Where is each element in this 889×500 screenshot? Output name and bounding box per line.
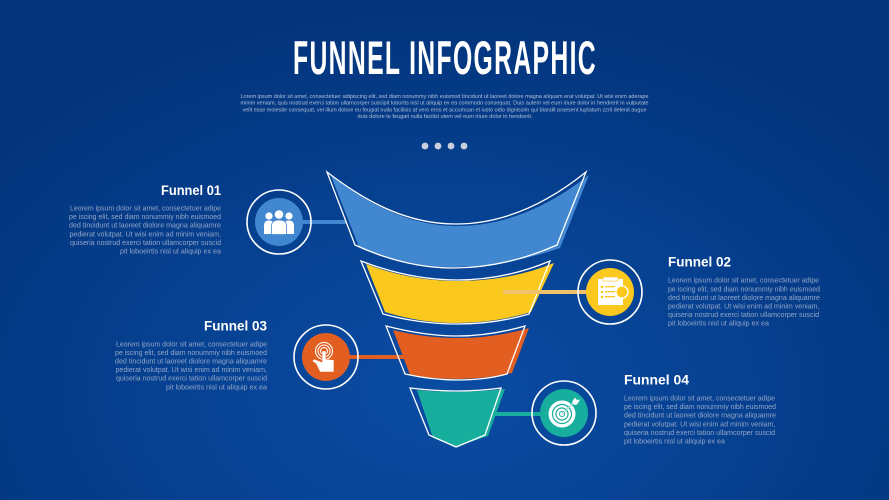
text block: funnel 02: pedierat volutpat. Ut wisi enim ad minim veniam, bbox=[668, 304, 820, 310]
text block: funnel 02: pe iscing elit, sed diam nonummiy nibh euismoed bbox=[668, 286, 820, 293]
text block: funnel 01: pit loboeirtis nisl ut aliquip ex ea bbox=[120, 248, 221, 256]
text block: funnel 01: quiseria nostrud exerci tation ullamcorper suscid bbox=[70, 240, 221, 247]
icon badge: touch bbox=[294, 325, 358, 389]
text block: funnel 01 bbox=[69, 182, 221, 256]
text block: funnel 01: ded tincidunt ut laoreet diolore magna aliquamre bbox=[69, 223, 221, 230]
text block: funnel 04: pit loboeirtis nisl ut aliquip ex ea bbox=[624, 438, 725, 446]
funnel segment 1: blue bbox=[327, 172, 589, 268]
text block: funnel 01: Leorem ipsum dolor sit amet, consectetuer adipe bbox=[70, 206, 221, 212]
intro text: Lorem ipsum dolor sit amet, consectetuer adipiscing elit, sed diam nonummy nibh euismod tincidunt ut laoreet dolore magna aliquam erat volutpat. Ut wisi enim aderape bbox=[240, 94, 648, 100]
intro text bbox=[240, 94, 648, 120]
icon badge: people bbox=[247, 190, 311, 254]
text block: funnel 03: pit loboeirtis nisl ut aliquip ex ea bbox=[166, 384, 267, 391]
text block: funnel 04 bbox=[624, 372, 776, 446]
connector: funnel 04 bbox=[490, 412, 546, 416]
funnel segment 2: yellow bbox=[361, 261, 554, 324]
text block: funnel 03: pe iscing elit, sed diam nonummiy nibh euismoed bbox=[115, 350, 267, 357]
pagination dots bbox=[422, 143, 467, 149]
text block: funnel 01: pe iscing elit, sed diam nonummiy nibh euismoed bbox=[69, 214, 221, 221]
icon badge: clipboard bbox=[578, 260, 642, 324]
text block: funnel 02 bbox=[668, 254, 820, 328]
text block: funnel 03: pedierat volutpat. Ut wisi enim ad minim veniam, bbox=[116, 367, 267, 374]
connector: funnel 01 bbox=[303, 220, 346, 224]
text block: funnel 02: ded tincidunt ut laoreet diolore magna aliquamre bbox=[668, 295, 820, 302]
text block: funnel 02: Leorem ipsum dolor sit amet, consectetuer adipe bbox=[668, 278, 819, 285]
text block: funnel 04: ded tincidunt ut laoreet diolore magna aliquamre bbox=[624, 413, 776, 420]
text block: funnel 04: Funnel 04 bbox=[624, 372, 689, 388]
connector: funnel 03 bbox=[350, 355, 406, 359]
text block: funnel 03: ded tincidunt ut laoreet diolore magna aliquamre bbox=[115, 358, 267, 366]
text block: funnel 01: pedierat volutpat. Ut wisi enim ad minim veniam, bbox=[70, 231, 221, 238]
text block: funnel 01: Funnel 01 bbox=[161, 182, 221, 198]
text block: funnel 03: quiseria nostrud exerci tation ullamcorper suscid bbox=[116, 376, 267, 383]
text block: funnel 04: pe iscing elit, sed diam nonummiy nibh euismoed bbox=[624, 404, 776, 411]
text block: funnel 03 bbox=[115, 318, 267, 391]
text block: funnel 03: Leorem ipsum dolor sit amet, consectetuer adipe bbox=[116, 341, 267, 348]
text block: funnel 04: pedierat volutpat. Ut wisi enim ad minim veniam, bbox=[624, 421, 776, 428]
intro text: velit esse molestie consequat, vel illum dolore eu feugiat nulla facilisis at vero eros et accumsan et iusto odio dignissim qui blandit praesent luptatum zzril delenit augue bbox=[242, 107, 646, 113]
intro text: minim veniam, quis nostrud exerci tation ullamcorper suscipit lobortis nisl ut aliquip ex ea commodo consequat. Duis autem vel eum iriure dolor in hendrerit in vulputate bbox=[240, 101, 648, 107]
icon badge: target bbox=[532, 381, 596, 445]
text block: funnel 02: quiseria nostrud exerci tation ullamcorper suscid bbox=[668, 312, 819, 319]
text block: funnel 02: Funnel 02 bbox=[668, 254, 731, 270]
text block: funnel 03: Funnel 03 bbox=[204, 318, 267, 334]
funnel segment 4: teal bbox=[410, 388, 505, 447]
funnel segment 3: orange bbox=[386, 326, 529, 380]
connector: funnel 02 bbox=[503, 290, 591, 294]
text block: funnel 04: quiseria nostrud exerci tation ullamcorper suscid bbox=[624, 430, 775, 437]
text block: funnel 04: Leorem ipsum dolor sit amet, consectetuer adipe bbox=[624, 396, 775, 402]
title: FUNNEL INFOGRAPHIC bbox=[293, 31, 597, 84]
intro text: duis dolore te feugait nulla facilisi utem vel eum iriure dolor in hendrerit. bbox=[358, 114, 533, 120]
text block: funnel 02: pit loboeirtis nisl ut aliquip ex ea bbox=[668, 321, 769, 328]
